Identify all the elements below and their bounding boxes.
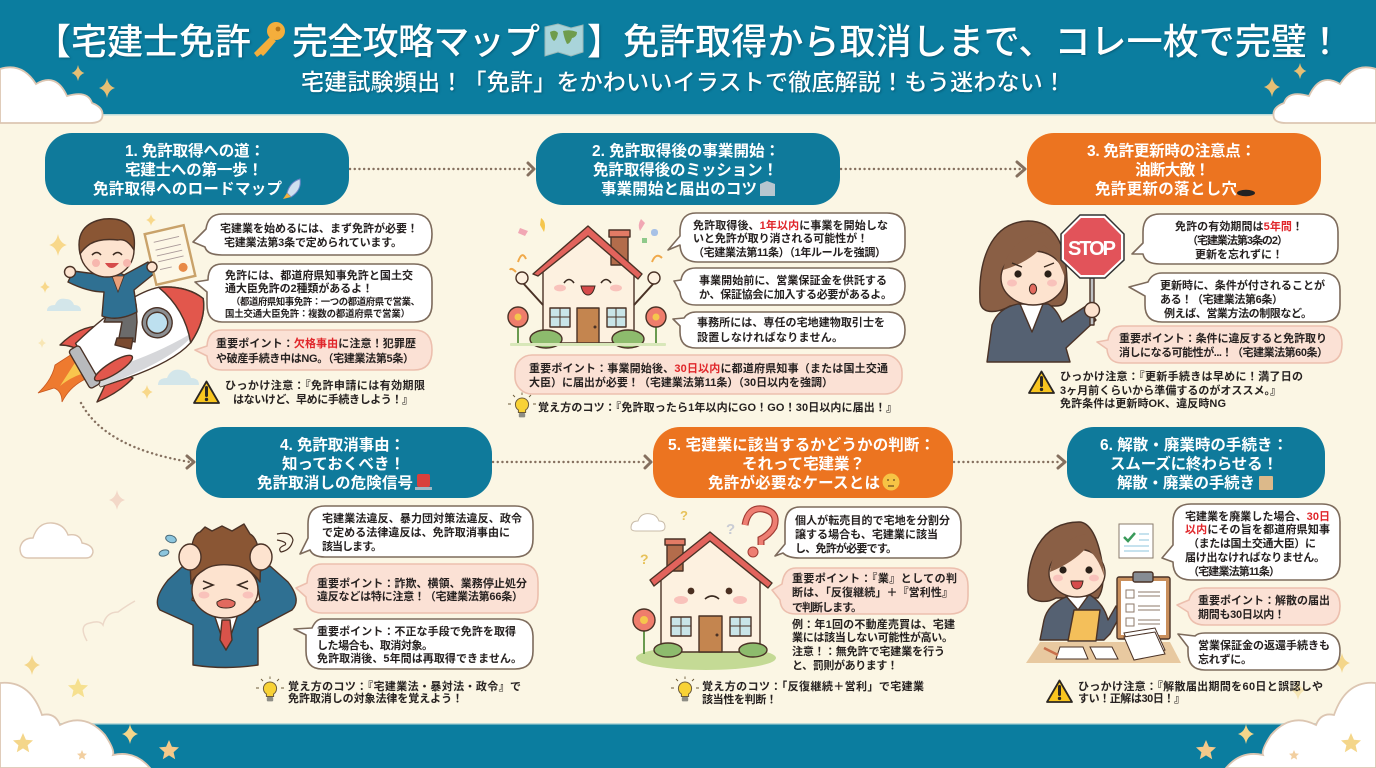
callout: dissolution period — [1177, 588, 1340, 625]
icon: warning triangle — [1047, 680, 1072, 702]
arrow: section 5 to 6 — [954, 456, 1065, 468]
heading: section 5: 5. 宅建業に該当するかどうかの判断： — [668, 435, 935, 454]
title: 完全攻略マップ — [292, 21, 540, 62]
memory tip: 覚え方のコツ：『免許取ったら1年以内にGO！GO！30日以内に届出！』 — [538, 400, 897, 414]
heading: section 3 — [1027, 133, 1321, 205]
callout: key point disqualification: や破産手続き中はNG。（宅建業法第5条） — [216, 351, 414, 365]
speech bubble: revocation grounds — [300, 506, 533, 557]
speech bubble: license types — [195, 264, 432, 322]
subtitle: 宅建試験頻出！「免許」をかわいいイラストで徹底解説！もう迷わない！ — [301, 69, 1066, 95]
panel: section 5 — [631, 427, 968, 706]
heading: section 3: 免許更新の落とし穴 — [1095, 179, 1237, 198]
callout: 30-day notification: 大臣）に届出が必要！（宅建業法第11条）（30日以内を強調） — [529, 375, 833, 389]
heading: section 5: 免許が必要なケースとは — [708, 473, 880, 492]
trap note: ひっかけ注意：『解散届出期間を60日と誤認しや — [1078, 679, 1323, 693]
speech bubble: five-year validity — [1132, 214, 1338, 264]
trap note — [225, 378, 425, 406]
heading: section 6: 6. 解散・廃業時の手続き： — [1100, 435, 1288, 454]
text block: example and warning: 注意！：無免許で宅建業を行う — [792, 644, 945, 658]
speech bubble: five-year validity: 更新を忘れずに！ — [1195, 247, 1283, 261]
speech bubble: resale subdivision: 譲する場合も、宅建業に該当 — [795, 527, 938, 541]
icon: key — [254, 22, 285, 57]
speech bubble: license types: 通大臣免許の2種類があるよ！ — [225, 281, 373, 295]
trap note: 3ヶ月前くらいから準備するのがオススメ。』 — [1060, 383, 1281, 397]
title: 】免許取得から取消しまで、コレ一枚で完璧！ — [587, 21, 1343, 62]
callout: dissolution period: 重要ポイント：解散の届出 — [1198, 593, 1330, 607]
callout: dissolution period: 期間も30日以内！ — [1198, 607, 1285, 621]
heading: section 2: 免許取得後のミッション！ — [593, 160, 778, 179]
arrow: section 1 to 2 — [350, 163, 534, 175]
panel: section 6 — [1026, 427, 1340, 705]
arrow: section 1 to 4 — [81, 403, 194, 468]
icon: warning triangle — [194, 382, 219, 403]
decoration: top right cloud — [1264, 63, 1376, 123]
speech bubble: deposit refund: 忘れずに。 — [1198, 652, 1252, 666]
illustration: worried boy — [157, 524, 296, 668]
illustration: woman with stop sign — [980, 215, 1124, 362]
speech bubble: improper means: 重要ポイント：不正な手段で免許を取得 — [317, 624, 516, 638]
heading: section 1: 宅建士への第一歩！ — [125, 160, 263, 179]
speech bubble: security deposit: か、保証協会に加入する必要があるよ。 — [699, 287, 892, 301]
speech bubble: security deposit — [674, 268, 905, 305]
heading: section 3: 3. 免許更新時の注意点： — [1087, 141, 1256, 160]
heading: section 5 — [653, 427, 953, 498]
speech bubble: revocation grounds: 宅建業法違反、暴力団対策法違反、政令 — [322, 511, 522, 525]
speech bubble: one-year rule: 免許取得後、1年以内に事業を開始しな — [693, 218, 888, 232]
speech bubble: closure notification — [1162, 504, 1340, 580]
decoration: left margin sparkles and clouds — [20, 490, 1350, 700]
speech bubble: resale subdivision: 個人が転売目的で宅地を分割分 — [795, 513, 950, 527]
callout: revocation risk: 重要ポイント：条件に違反すると免許取り — [1119, 331, 1327, 345]
memory tip — [702, 679, 924, 706]
callout: fraud and suspension — [296, 564, 538, 613]
heading: section 4: 4. 免許取消事由： — [280, 435, 405, 454]
memory tip: 覚え方のコツ：「反復継続＋営利」で宅建業 — [702, 679, 924, 693]
speech bubble: renewal conditions: ある！（宅建業法第6条） — [1160, 292, 1283, 306]
arrow: section 2 to 3 — [841, 162, 1025, 176]
speech bubble: closure notification: （または国土交通大臣）に — [1188, 536, 1316, 550]
trap note: 免許条件は更新時OK、違反時NG — [1060, 396, 1226, 410]
speech bubble: closure notification: 宅建業を廃業した場合、30日 — [1185, 509, 1330, 523]
callout: revocation risk: 消しになる可能性が...！（宅建業法第60条） — [1119, 345, 1328, 359]
heading: section 1: 1. 免許取得への道： — [125, 141, 265, 160]
memory tip — [288, 679, 521, 705]
speech bubble: resale subdivision: し、免許が必要です。 — [795, 541, 897, 555]
speech bubble: one-year rule: いと免許が取り消される可能性が！ — [693, 231, 868, 245]
icon: light bulb — [671, 676, 699, 701]
heading: section 4: 知っておくべき！ — [282, 454, 405, 473]
speech bubble: deposit refund: 営業保証金の返還手続きも — [1198, 638, 1330, 652]
panel: section 1 — [38, 133, 432, 406]
speech bubble: one-year rule — [668, 213, 905, 262]
icon: light bulb — [256, 676, 284, 701]
speech bubble: license required — [193, 214, 432, 255]
memory tip: 覚え方のコツ：『宅建業法・暴対法・政令』で — [288, 679, 521, 693]
trap note: はないけど、早めに手続きしよう！』 — [233, 392, 413, 406]
speech bubble: renewal conditions: 例えば、営業方法の制限など。 — [1164, 306, 1312, 320]
heading: section 4 — [196, 427, 492, 498]
trap note — [1078, 679, 1323, 705]
panel: section 2 — [508, 133, 905, 417]
speech bubble: license types: （都道府県知事免許：一つの都道府県で営業、 — [231, 296, 420, 307]
decoration: bottom left cloud — [0, 683, 179, 768]
speech bubble: renewal conditions — [1129, 273, 1340, 322]
trap note: ひっかけ注意：『更新手続きは早めに！満了日の — [1060, 369, 1303, 383]
decoration: top left cloud — [0, 65, 115, 123]
heading: section 5: それって宅建業？ — [742, 454, 865, 473]
title — [35, 21, 1343, 62]
panel: section 4 — [157, 427, 538, 705]
callout: business judgement — [772, 568, 968, 614]
heading: section 1: 免許取得へのロードマップ — [93, 179, 282, 198]
illustration: puzzled house: ? — [640, 551, 649, 567]
speech bubble: revocation grounds: で定める法律違反は、免許取消事由に — [322, 525, 510, 539]
callout: 30-day notification: 重要ポイント：事業開始後、30日以内に都道府県知事（または国土交通 — [529, 361, 888, 375]
speech bubble: security deposit: 事業開始前に、営業保証金を供託する — [699, 273, 887, 287]
speech bubble: five-year validity: 免許の有効期間は5年間！ — [1175, 219, 1303, 233]
title: 【宅建士免許 — [35, 21, 251, 62]
speech bubble: licensed agent — [673, 312, 905, 348]
icon: map — [545, 24, 583, 56]
icon: warning triangle — [1029, 372, 1054, 393]
speech bubble: closure notification: 届け出なければなりません。 — [1185, 550, 1325, 564]
speech bubble: improper means — [294, 619, 533, 669]
speech bubble: improper means: した場合も、取消対象。 — [317, 638, 433, 652]
callout: business judgement: で判断します。 — [792, 600, 862, 614]
footer band — [0, 723, 1376, 768]
speech bubble: one-year rule: （宅建業法第11条）（1年ルールを強調） — [693, 245, 886, 259]
text block: example and warning: と、罰則があります！ — [792, 658, 898, 672]
header band — [0, 0, 1376, 116]
callout: business judgement: 断は、「反復継続」＋『営利性』 — [792, 585, 953, 599]
illustration: happy house — [508, 218, 666, 348]
trap note: すい！正解は30日！』 — [1078, 691, 1185, 705]
illustration: puzzled house: ? — [726, 521, 735, 538]
speech bubble: resale subdivision — [775, 507, 961, 558]
heading: section 6: 解散・廃業の手続き — [1117, 473, 1255, 492]
trap note — [1060, 369, 1303, 410]
callout: revocation risk — [1097, 326, 1342, 363]
speech bubble: five-year validity: （宅建業法第3条の2） — [1187, 233, 1288, 247]
speech bubble: license required: 宅建業を始めるには、まず免許が必要！ — [220, 221, 418, 235]
heading: section 2: 事業開始と届出のコツ — [601, 179, 757, 198]
speech bubble: closure notification: 以内にその旨を都道府県知事 — [1185, 522, 1330, 536]
illustration: puzzled house — [631, 508, 776, 670]
memory tip: 該当性を判断！ — [702, 692, 777, 706]
text block: example and warning — [792, 617, 955, 672]
illustration: boy on a rocket — [38, 214, 221, 402]
speech bubble: license types: 国土交通大臣免許：複数の都道府県で営業） — [225, 308, 410, 319]
heading: section 2: 2. 免許取得後の事業開始： — [592, 141, 780, 160]
speech bubble: license required: 宅建業法第3条で定められています。 — [224, 235, 402, 249]
heading: section 2 — [536, 133, 840, 205]
callout: business judgement: 重要ポイント：『業』としての判 — [792, 571, 957, 585]
heading: section 3: 油断大敵！ — [1135, 160, 1210, 179]
callout: 30-day notification — [515, 355, 902, 394]
heading: section 4: 免許取消しの危険信号 — [257, 473, 413, 492]
illustration: woman with stop sign: STOP — [1068, 238, 1116, 260]
decoration: bottom right cloud — [1196, 683, 1376, 768]
text block: example and warning: 例：年1回の不動産売買は、宅建 — [792, 617, 955, 631]
callout: key point disqualification — [195, 330, 432, 370]
callout: key point disqualification: 重要ポイント：欠格事由に注意！犯罪歴 — [216, 336, 416, 350]
icon: light bulb — [508, 392, 536, 417]
speech bubble: license types: 免許には、都道府県知事免許と国土交 — [225, 268, 413, 282]
heading: section 6 — [1067, 427, 1325, 498]
speech bubble: licensed agent: 設置しなければなりません。 — [697, 330, 843, 344]
illustration: puzzled house: ? — [680, 508, 688, 523]
callout: fraud and suspension: 違反などは特に注意！（宅建業法第66条） — [317, 589, 523, 603]
speech bubble: renewal conditions: 更新時に、条件が付されることが — [1160, 278, 1325, 292]
trap note: ひっかけ注意：『免許申請には有効期限 — [225, 378, 425, 392]
text block: example and warning: 業には該当しない可能性が高い。 — [792, 630, 953, 644]
heading: section 1 — [45, 133, 349, 205]
arrow: section 4 to 5 — [493, 456, 651, 468]
heading: section 6: スムーズに終わらせる！ — [1110, 454, 1278, 473]
speech bubble: licensed agent: 事務所には、専任の宅地建物取引士を — [697, 315, 885, 329]
panel: section 3 — [980, 133, 1342, 410]
callout: fraud and suspension: 重要ポイント：詐欺、横領、業務停止処分 — [317, 576, 527, 590]
speech bubble: revocation grounds: 該当します。 — [322, 539, 382, 553]
speech bubble: deposit refund — [1178, 633, 1340, 670]
illustration: woman with checklist — [1026, 522, 1181, 663]
speech bubble: improper means: 免許取消後、5年間は再取得できません。 — [317, 651, 522, 665]
speech bubble: closure notification: （宅建業法第11条） — [1188, 564, 1280, 578]
memory tip: 免許取消しの対象法律を覚えよう！ — [288, 691, 463, 705]
